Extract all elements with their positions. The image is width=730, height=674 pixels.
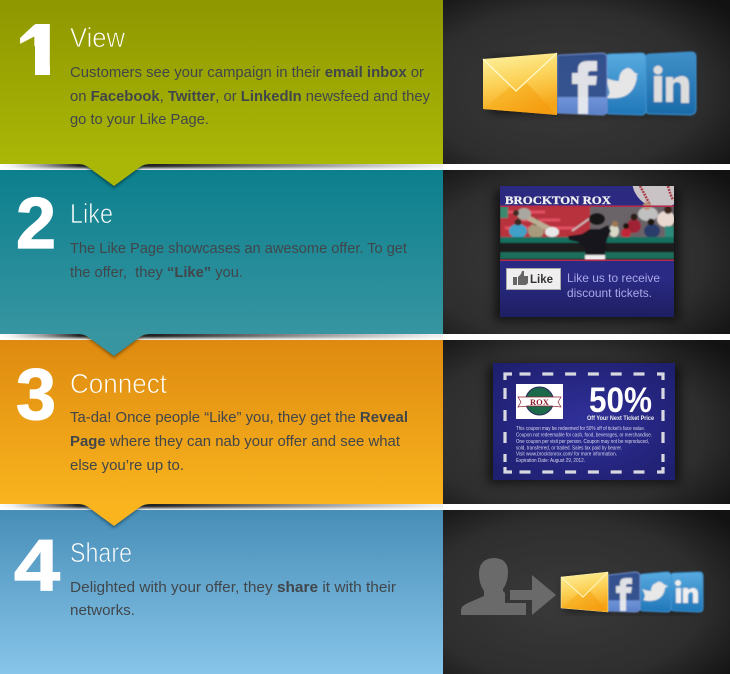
heading: Connect: Connect: [70, 368, 167, 399]
description: share: networks.: [70, 603, 135, 619]
heading: Like: Like: [70, 198, 113, 229]
coupon terms: This coupon may be redeemed for 50% off of ticket's face value.: [516, 426, 645, 432]
heading: View: View: [70, 22, 126, 53]
ad caption: [567, 271, 660, 300]
50% offer: 50%: [589, 381, 652, 420]
Rox logo: [516, 384, 563, 419]
like button: [506, 268, 560, 290]
number 4: 4: [14, 526, 60, 606]
coupon terms: [516, 426, 652, 464]
coupon terms: Expiration Date: August 29, 2012.: [516, 458, 585, 464]
description: connect: else you’re up to.: [70, 458, 184, 474]
description: connect: Page where they can nab your offer and see what: [70, 434, 400, 450]
panel: step 3 connect: [0, 340, 730, 504]
baseball: [632, 186, 674, 206]
dashed border: [505, 374, 663, 472]
like button: Like: [530, 272, 553, 286]
pointer 3 to 4: [0, 504, 443, 528]
pointer 1 to 2: [0, 164, 443, 188]
icons: email, Facebook, Twitter, LinkedIn: [561, 572, 703, 612]
heading: Share: Share: [70, 537, 132, 568]
coupon terms: Coupon not redeemable for cash, food, beverages, or merchandise.: [516, 432, 652, 438]
coupon: [488, 363, 680, 483]
ad title: BROCKTON ROX: [505, 195, 612, 207]
description: share: [70, 580, 396, 619]
ad caption: Like us to receive: [567, 271, 660, 285]
description: view: on Facebook, Twitter, or LinkedIn newsfeed and they: [70, 89, 431, 105]
description: like: [70, 241, 407, 281]
icons: email, Facebook, Twitter, LinkedIn: [483, 52, 696, 115]
stadium photo: [500, 202, 675, 261]
description: share: Delighted with your offer, they share it with their: [70, 580, 396, 596]
ad caption: discount tickets.: [567, 286, 652, 300]
50% offer: Off Your Next Ticket Price: [587, 416, 655, 422]
Brockton Rox Like page ad: [492, 186, 682, 324]
number 3: 3: [16, 355, 56, 435]
description: connect: Ta-da! Once people “Like” you, they get the Reveal: [70, 410, 408, 426]
description: view: [70, 65, 431, 128]
arrow: [510, 575, 556, 615]
coupon terms: Visit www.brocktonrox.com/ for more information.: [516, 452, 617, 458]
coupon terms: sold, transferred, or traded. Sales tax paid by bearer.: [516, 445, 622, 451]
description: view: Customers see your campaign in their email inbox or: [70, 65, 424, 81]
number 2: 2: [16, 184, 56, 264]
panel: step 2 like: [0, 152, 730, 674]
description: like: The Like Page showcases an awesome offer. To get: [70, 241, 407, 257]
panel: step 4 share: [0, 510, 730, 674]
coupon terms: One coupon per visit per person. Coupon may not be reproduced,: [516, 439, 649, 445]
description: view: go to your Like Page.: [70, 112, 209, 128]
panel: step 1 view: [0, 0, 730, 164]
Rox logo: ROX: [530, 397, 550, 407]
pointer 2 to 3: [0, 334, 443, 358]
description: like: the offer, they “Like” you.: [70, 265, 243, 281]
description: connect: [70, 410, 408, 474]
icon: person: [461, 558, 526, 615]
number 1: 1: [16, 11, 64, 91]
